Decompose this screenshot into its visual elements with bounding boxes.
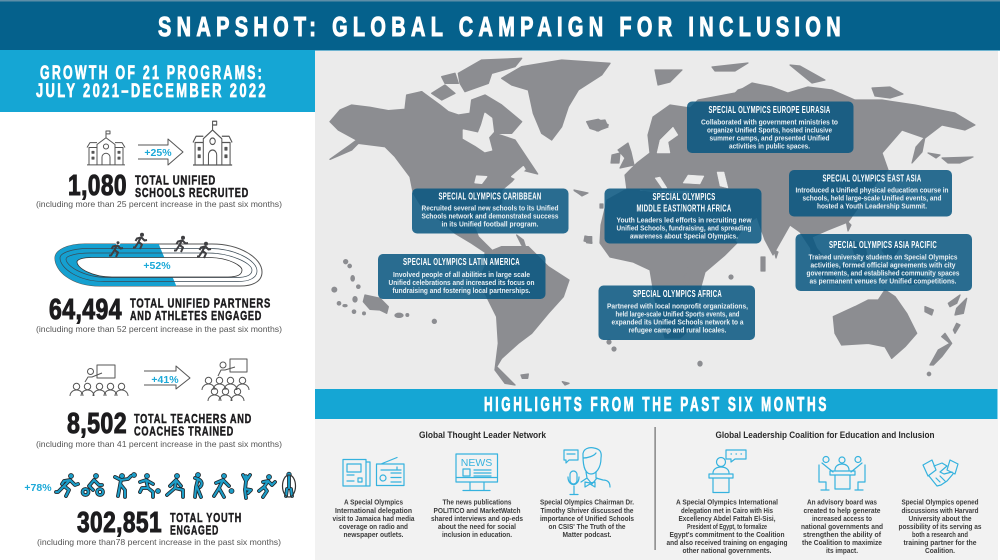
stat: youth engaged: +78% (24, 482, 52, 494)
icon: news monitor (456, 454, 498, 490)
section: Global Leadership Coalition (666, 430, 982, 555)
section: Global Thought Leader Network: importance of Unified Schools (540, 514, 634, 523)
section: Global Thought Leader Network: Global Thought Leader Network (419, 430, 547, 440)
callout: Middle East/North Africa: awareness about Special Olympics. (630, 232, 738, 240)
stat: unified schools: TOTAL UNIFIED (135, 172, 216, 188)
section: Global Leadership Coalition: Excellency Abdel Fattah El-Sisi, (678, 514, 776, 523)
panel: world map (315, 50, 1000, 389)
callout: Caribbean: SPECIAL OLYMPICS CARIBBEAN (438, 190, 542, 202)
callout: Latin America (378, 254, 546, 299)
icon: news monitor: NEWS (461, 457, 492, 469)
section: Global Leadership Coalition: strengthen the ability of (803, 530, 882, 539)
section: Global Thought Leader Network: on CSIS' The Truth of the (548, 522, 626, 531)
callout: Africa (598, 286, 755, 340)
section: Global Thought Leader Network: Matter podcast. (562, 530, 612, 539)
stat: partners and athletes (36, 233, 282, 334)
arrow: plus 41 percent: +41% (151, 374, 179, 386)
growth heading band: GROWTH OF 21 PROGRAMS: (40, 62, 264, 84)
section: Global Leadership Coalition: training partner for the (904, 538, 976, 547)
callout: Caribbean (412, 188, 568, 234)
stat: youth engaged: ENGAGED (170, 522, 219, 538)
callout: Caribbean: in its Unified football program. (442, 220, 538, 228)
icon: meeting table (819, 456, 865, 490)
section: Global Thought Leader Network: POLITICO and MarketWatch (434, 506, 521, 515)
section: Global Leadership Coalition: created to help generate (804, 506, 880, 515)
stat: teachers and coaches (36, 359, 282, 449)
section: Global Leadership Coalition: Special Olympics opened (902, 498, 979, 506)
header banner (0, 0, 1000, 50)
section: Global Thought Leader Network: The news publications (442, 498, 512, 506)
stat: partners and athletes: 64,494 (49, 294, 122, 326)
icon: running track (55, 233, 262, 286)
callout: Europe Eurasia: activities in public spaces. (729, 142, 810, 150)
section: Global Leadership Coalition: A Special Olympics International (676, 498, 778, 506)
section: Global Leadership Coalition: An advisory board was (807, 498, 877, 506)
callout: Asia Pacific: as permanent venues for Unified competitions. (810, 276, 956, 286)
callout: Africa: Partnered with local nonprofit organizations, (607, 302, 748, 310)
stat: youth engaged: 302,851 (77, 507, 162, 539)
callout: Asia Pacific (796, 234, 972, 291)
stat: unified schools: (including more than 25 percent increase in the past six months) (36, 199, 282, 209)
section: Global Leadership Coalition: increased access to (812, 514, 872, 523)
callout: Europe Eurasia: summer camps, and presented Unified (710, 134, 830, 142)
stat: unified schools: SCHOOLS RECRUITED (135, 185, 249, 200)
stat: teachers and coaches: TOTAL TEACHERS AND (134, 411, 252, 426)
callout: Africa: SPECIAL OLYMPICS AFRICA (633, 288, 722, 300)
callout: Europe Eurasia: organize Unified Sports, hosted inclusive (707, 126, 832, 134)
section: Global Thought Leader Network: A Special Olympics (344, 498, 403, 506)
arrow: plus 41 percent (144, 366, 190, 389)
section: Global Leadership Coalition: and also received training on engaging (666, 538, 788, 547)
callout: Asia Pacific: activities, formed official agreements with city (810, 260, 956, 270)
stat: unified schools: 1,080 (68, 170, 127, 202)
callout: East Asia: hosted a Youth Leadership Summit. (817, 202, 927, 210)
panel: highlights (315, 389, 998, 560)
section: Global Thought Leader Network: about the need for social (438, 522, 516, 531)
callout: Africa: held large-scale Unified Sports events, and (616, 310, 740, 318)
callout: Asia Pacific: Trained university students on Special Olympics (808, 252, 958, 262)
callout: Latin America: Involved people of all abilities in large scale (393, 270, 530, 279)
section: Global Thought Leader Network: International delegation (335, 506, 412, 515)
icons: runners (109, 233, 211, 258)
callout: Middle East/North Africa: SPECIAL OLYMPICS (652, 191, 716, 203)
icons: sports figures (56, 474, 296, 498)
section: Global Leadership Coalition: Egypt's commitment to the Coalition (670, 530, 785, 539)
icon: running track: +52% (143, 260, 171, 272)
section: Global Leadership Coalition: delegation met in Cairo with His (681, 506, 773, 515)
callout: East Asia (789, 170, 952, 216)
stat: teachers and coaches: 8,502 (67, 408, 127, 440)
callout: Caribbean: Recruited several new schools to its Unified (422, 204, 559, 212)
icon: man with microphone (564, 448, 610, 494)
callout: Europe Eurasia (687, 102, 854, 153)
section: Global Leadership Coalition: Coalition. (925, 546, 955, 555)
section: Global Thought Leader Network: Timothy Shriver discussed the (540, 506, 634, 515)
icon: large school (193, 121, 232, 165)
section: Global Leadership Coalition: national governments and (801, 522, 883, 531)
section: Global Thought Leader Network: visit to Jamaica had media (332, 514, 415, 523)
section: Global Leadership Coalition: its impact. (826, 546, 858, 555)
callout: Caribbean: Schools network and demonstrated success (422, 212, 558, 220)
map: continents (330, 58, 975, 385)
callout: Europe Eurasia: Collaborated with government ministries to (701, 118, 838, 126)
section: Global Thought Leader Network: inclusion in education. (442, 530, 512, 539)
callout: Asia Pacific: governments, and established community spaces (806, 268, 960, 278)
highlights heading band (315, 389, 998, 419)
callout: Latin America: SPECIAL OLYMPICS LATIN AMERICA (403, 256, 520, 268)
arrow: plus 25 percent (138, 139, 183, 165)
stat: teachers and coaches: (including more than 41 percent increase in the past six months) (36, 439, 282, 449)
icon: newspaper and radio (343, 458, 404, 486)
stat: youth engaged: TOTAL YOUTH (170, 510, 242, 525)
callout: Middle East/North Africa: Unified Schools, fundraising, and spreading (616, 224, 752, 232)
stat: youth engaged: (including more than78 percent increase in the past six months) (37, 537, 281, 547)
stat: partners and athletes: (including more than 52 percent increase in the past six months) (36, 324, 282, 334)
section: Global Leadership Coalition: Global Leadership Coalition for Education and Inclusion (716, 430, 934, 440)
stat: youth engaged (24, 474, 296, 547)
section: Global Leadership Coalition: other national governments. (682, 546, 772, 555)
section: Global Leadership Coalition: President of Egypt, to formalize (687, 522, 767, 531)
callout: East Asia: SPECIAL OLYMPICS EAST ASIA (822, 172, 922, 184)
panel: growth statistics (0, 50, 315, 560)
callout: Middle East/North Africa: Youth Leaders led efforts in recruiting new (616, 216, 752, 224)
callout: East Asia: Introduced a Unified physical education course in (796, 186, 949, 194)
stat: unified schools (36, 121, 282, 209)
growth heading band: JULY 2021–DECEMBER 2022 (36, 80, 268, 102)
stat: partners and athletes: TOTAL UNIFIED PARTNERS (130, 296, 271, 310)
callout: Africa: expanded its Unified Schools network to a (612, 318, 744, 326)
stat: partners and athletes: AND ATHLETES ENGAGED (130, 308, 262, 323)
arrow: plus 25 percent: +25% (144, 147, 172, 159)
callout: Latin America: Unified celebrations and increased its focus on (388, 278, 535, 287)
section: Global Thought Leader Network: shared interviews and op-eds (431, 514, 523, 523)
growth heading band (0, 50, 315, 112)
callout: Middle East/North Africa: MIDDLE EAST/NORTH AFRICA (636, 202, 732, 214)
icon: large classroom (202, 359, 249, 401)
section: Global Leadership Coalition: the Coalition to maximize (802, 538, 882, 547)
icon: speaker at podium (709, 450, 746, 492)
stat: teachers and coaches: COACHES TRAINED (134, 424, 234, 438)
icon: handshake (923, 460, 958, 486)
section: Global Leadership Coalition: both a research and (912, 530, 968, 539)
section: Global Leadership Coalition: discussions with Harvard (902, 506, 979, 515)
section: Global Thought Leader Network (332, 430, 634, 539)
section: Global Thought Leader Network: newspaper outlets. (344, 530, 404, 539)
callout: Middle East/North Africa (604, 188, 762, 244)
icon: small classroom (70, 365, 128, 396)
section: Global Leadership Coalition: possibility of its serving as (898, 522, 982, 531)
icon: small school (87, 131, 125, 165)
callout: Latin America: fundraising and fostering local partnerships. (392, 286, 530, 295)
section: Global Thought Leader Network: Special Olympics Chairman Dr. (540, 498, 634, 506)
callout: East Asia: schools, held large-scale Unified events, and (802, 194, 942, 202)
callout: Africa: refugee camp and rural locales. (628, 326, 726, 334)
section: Global Leadership Coalition: University about the (908, 514, 972, 523)
callout: Europe Eurasia: SPECIAL OLYMPICS EUROPE EURASIA (708, 104, 830, 116)
section: Global Thought Leader Network: coverage on radio and (339, 522, 408, 531)
